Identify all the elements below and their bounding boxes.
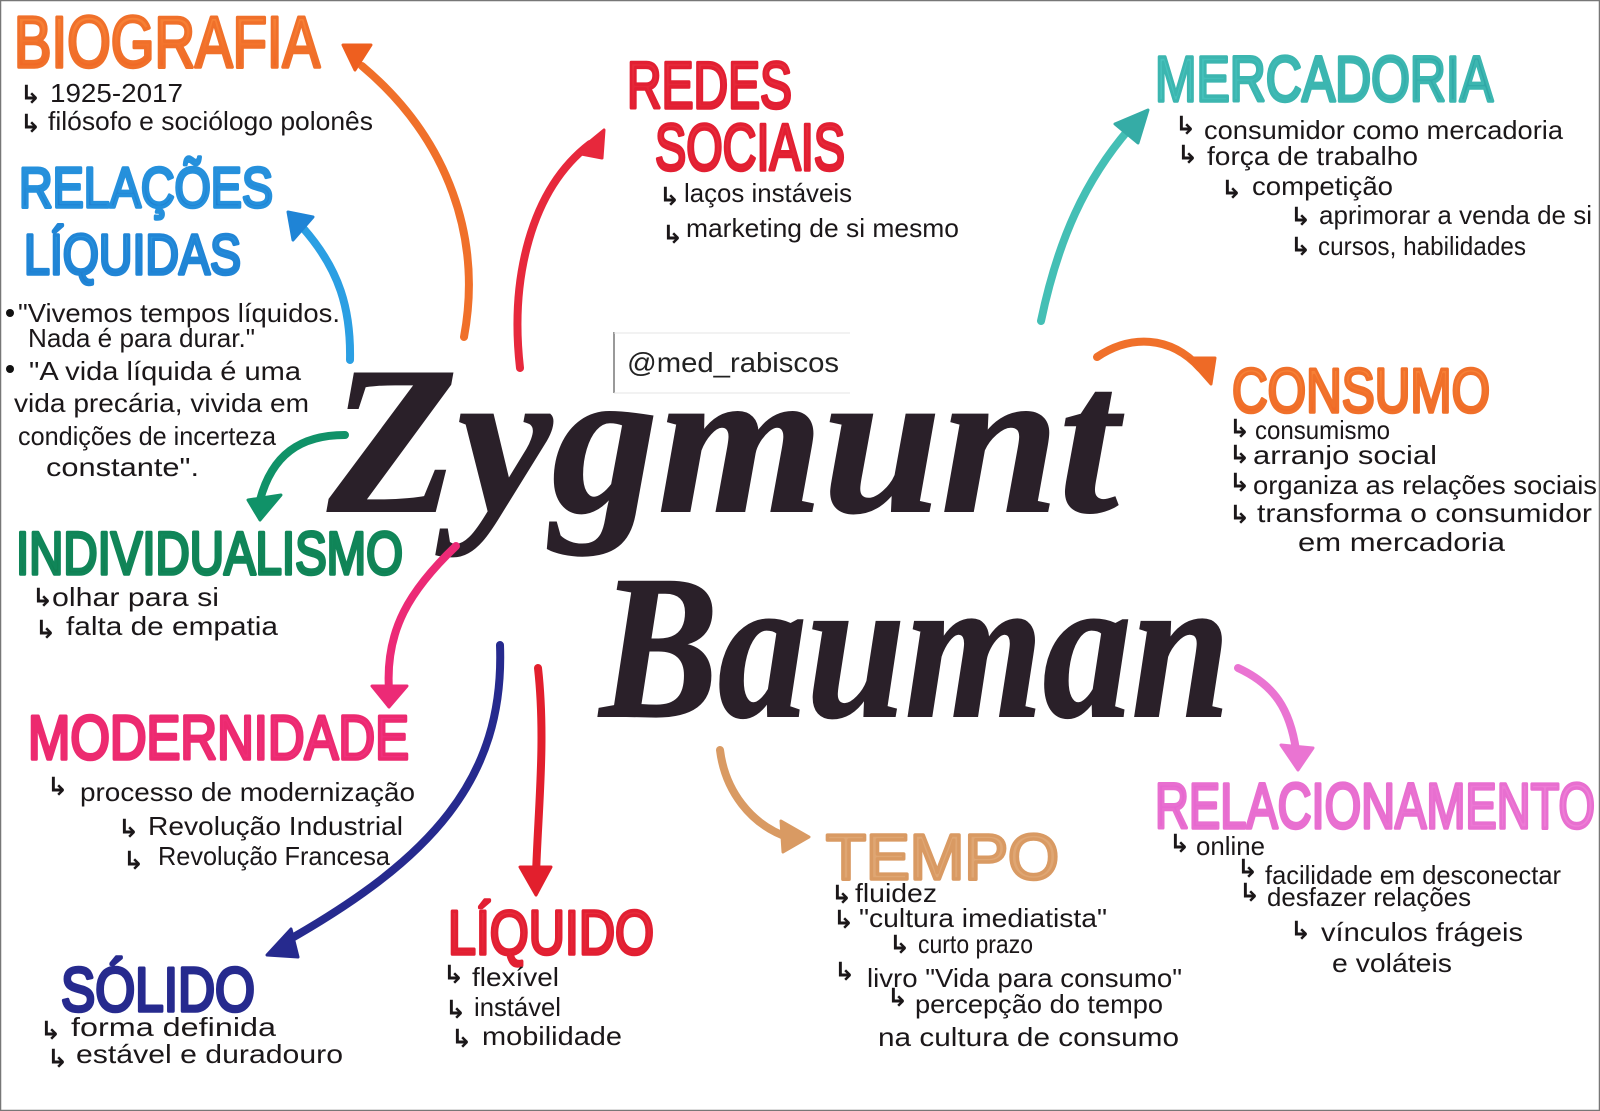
- list: Consumo items: consumismo: [1255, 415, 1390, 445]
- list: Individualismo items: olhar para si: [52, 582, 219, 612]
- arrow: to Relações Líquidas: [288, 212, 350, 360]
- list: Líquido items: instável: [474, 992, 561, 1022]
- arrow: to Mercadoria: [1041, 110, 1148, 321]
- title: Zygmunt Bauman: Bauman: [598, 534, 1230, 761]
- list: Biografia items: filósofo e sociólogo polonês: [48, 106, 373, 136]
- list: Relacionamento items: ↳: [1239, 878, 1260, 907]
- list: Líquido items: flexível: [472, 962, 559, 992]
- list: Redes Sociais items: [659, 178, 959, 249]
- list: Redes Sociais items: laços instáveis: [684, 178, 852, 208]
- list: Sólido items: [40, 1012, 343, 1073]
- list: Modernidade items: ↳: [47, 772, 68, 801]
- list: Consumo items: ↳: [1229, 468, 1250, 497]
- quotes: vida precária, vivida em: [14, 388, 309, 418]
- heading: Redes Sociais: REDES: [627, 48, 792, 122]
- list: Consumo items: arranjo social: [1253, 440, 1437, 470]
- panel: Relações Líquidas: [6, 156, 340, 482]
- list: Redes Sociais items: ↳: [659, 182, 680, 211]
- panel: Mercadoria: [1155, 43, 1592, 261]
- list: Relacionamento items: e voláteis: [1332, 948, 1452, 978]
- list: Individualismo items: ↳: [35, 615, 56, 644]
- list: Biografia items: ↳: [20, 109, 41, 138]
- list: Mercadoria items: cursos, habilidades: [1318, 231, 1526, 261]
- panel: Consumo: [1229, 357, 1597, 557]
- list: Relacionamento items: vínculos frágeis: [1321, 917, 1523, 947]
- heading: Relações Líquidas: RELAÇÕES: [19, 156, 273, 220]
- list: Modernidade items: Revolução Francesa: [158, 841, 391, 871]
- list: Líquido items: ↳: [445, 995, 466, 1024]
- list: Biografia items: ↳: [20, 80, 41, 109]
- panel: Tempo: [826, 821, 1182, 1052]
- list: Modernidade items: [47, 772, 415, 875]
- heading: Individualismo: INDIVIDUALISMO: [16, 520, 403, 587]
- list: Mercadoria items: ↳: [1221, 175, 1242, 204]
- list: Modernidade items: ↳: [123, 846, 144, 875]
- quotes: Nada é para durar.": [28, 323, 255, 353]
- heading: Tempo: TEMPO: [826, 821, 1059, 893]
- quotes: constante".: [46, 452, 199, 482]
- quotes: "A vida líquida é uma: [29, 356, 302, 386]
- list: Tempo items: ↳: [889, 930, 910, 959]
- list: Tempo items: [831, 878, 1182, 1052]
- heading: Sólido: SÓLIDO: [61, 956, 255, 1025]
- list: Redes Sociais items: ↳: [662, 220, 683, 249]
- arrow: to Líquido: [520, 668, 551, 895]
- list: Sólido items: ↳: [40, 1016, 61, 1045]
- list: Consumo items: organiza as relações sociais: [1253, 470, 1597, 500]
- list: Relacionamento items: ↳: [1237, 854, 1258, 883]
- list: Biografia items: 1925-2017: [50, 78, 183, 108]
- list: Individualismo items: ↳: [32, 583, 53, 612]
- list: Mercadoria items: aprimorar a venda de si: [1319, 200, 1592, 230]
- list: Biografia items: [20, 78, 373, 138]
- panel: Biografia: [14, 3, 373, 138]
- arrow: to Sólido: [267, 645, 500, 957]
- list: Tempo items: fluidez: [855, 878, 937, 908]
- list: Sólido items: estável e duradouro: [76, 1039, 343, 1069]
- title: Zygmunt Bauman: Zygmunt: [327, 325, 1124, 557]
- heading: Modernidade: MODERNIDADE: [28, 704, 409, 773]
- list: Líquido items: [443, 960, 622, 1053]
- list: Mercadoria items: consumidor como mercadoria: [1204, 115, 1564, 145]
- list: Sólido items: forma definida: [71, 1012, 277, 1042]
- heading: Mercadoria: MERCADORIA: [1155, 43, 1493, 115]
- quotes: condições de incerteza: [18, 421, 277, 451]
- list: Tempo items: na cultura de consumo: [878, 1022, 1179, 1052]
- list: Consumo items: ↳: [1229, 440, 1250, 469]
- list: Mercadoria items: ↳: [1290, 202, 1311, 231]
- heading: Redes Sociais: [627, 48, 845, 184]
- panel: Líquido: [443, 899, 654, 1053]
- list: Modernidade items: ↳: [118, 814, 139, 843]
- list: Tempo items: livro "Vida para consumo": [867, 963, 1182, 993]
- arrow: to Tempo: [720, 750, 809, 852]
- panel: Individualismo: [16, 520, 403, 644]
- list: Líquido items: ↳: [451, 1024, 472, 1053]
- list: Consumo items: ↳: [1229, 500, 1250, 529]
- list: Tempo items: ↳: [887, 983, 908, 1012]
- list: Individualismo items: falta de empatia: [66, 611, 279, 641]
- panel: Modernidade: [28, 704, 415, 875]
- list: Relacionamento items: [1169, 829, 1561, 978]
- list: Tempo items: ↳: [831, 880, 852, 909]
- watermark: @med_rabiscos: [614, 332, 850, 393]
- list: Consumo items: ↳: [1229, 414, 1250, 443]
- list: Redes Sociais items: marketing de si mesmo: [686, 213, 959, 243]
- heading: Redes Sociais: SOCIAIS: [655, 110, 845, 184]
- heading: Relações Líquidas: LÍQUIDAS: [24, 223, 241, 287]
- quotes: [6, 298, 340, 482]
- list: Mercadoria items: ↳: [1177, 140, 1198, 169]
- list: Mercadoria items: ↳: [1290, 232, 1311, 261]
- list: Relacionamento items: online: [1196, 831, 1265, 861]
- list: Tempo items: "cultura imediatista": [859, 903, 1107, 933]
- list: Relacionamento items: ↳: [1169, 829, 1190, 858]
- heading: Consumo: CONSUMO: [1232, 357, 1490, 426]
- list: Consumo items: [1229, 414, 1597, 557]
- list: Tempo items: curto prazo: [918, 929, 1033, 959]
- list: Modernidade items: Revolução Industrial: [148, 811, 403, 841]
- quotes: "Vivemos tempos líquidos.: [18, 298, 340, 328]
- panel: Sólido: [40, 956, 343, 1073]
- list: Mercadoria items: ↳: [1175, 111, 1196, 140]
- list: Tempo items: ↳: [833, 905, 854, 934]
- list: Mercadoria items: força de trabalho: [1207, 141, 1418, 171]
- list: Líquido items: ↳: [443, 960, 464, 989]
- list: Tempo items: percepção do tempo: [915, 989, 1163, 1019]
- list: Relacionamento items: desfazer relações: [1267, 882, 1471, 912]
- heading: Relações Líquidas: [19, 156, 273, 287]
- arrow: to Redes Sociais: [518, 130, 604, 368]
- list: Relacionamento items: facilidade em desconectar: [1265, 860, 1561, 890]
- list: Individualismo items: [32, 582, 279, 644]
- panel: Redes Sociais: [627, 48, 959, 249]
- list: Tempo items: ↳: [834, 957, 855, 986]
- list: Mercadoria items: [1175, 111, 1592, 261]
- watermark: @med_rabiscos: @med_rabiscos: [627, 347, 839, 378]
- arrow: to Biografia: [343, 45, 469, 337]
- list: Mercadoria items: competição: [1252, 171, 1393, 201]
- list: Consumo items: em mercadoria: [1298, 527, 1506, 557]
- arrow: to Modernidade: [372, 546, 456, 707]
- title: Zygmunt Bauman: [327, 325, 1230, 761]
- list: Modernidade items: processo de modernização: [80, 777, 415, 807]
- arrow: to Consumo: [1097, 342, 1215, 384]
- list: Líquido items: mobilidade: [482, 1021, 622, 1051]
- arrow: to Individualismo: [248, 435, 345, 520]
- heading: Biografia: BIOGRAFIA: [14, 3, 320, 83]
- list: Sólido items: ↳: [47, 1044, 68, 1073]
- arrow: to Relacionamento: [1238, 668, 1313, 770]
- list: Consumo items: transforma o consumidor: [1257, 498, 1592, 528]
- list: Relacionamento items: ↳: [1290, 916, 1311, 945]
- panel: Relacionamento: [1155, 770, 1595, 978]
- heading: Líquido: LÍQUIDO: [448, 899, 654, 968]
